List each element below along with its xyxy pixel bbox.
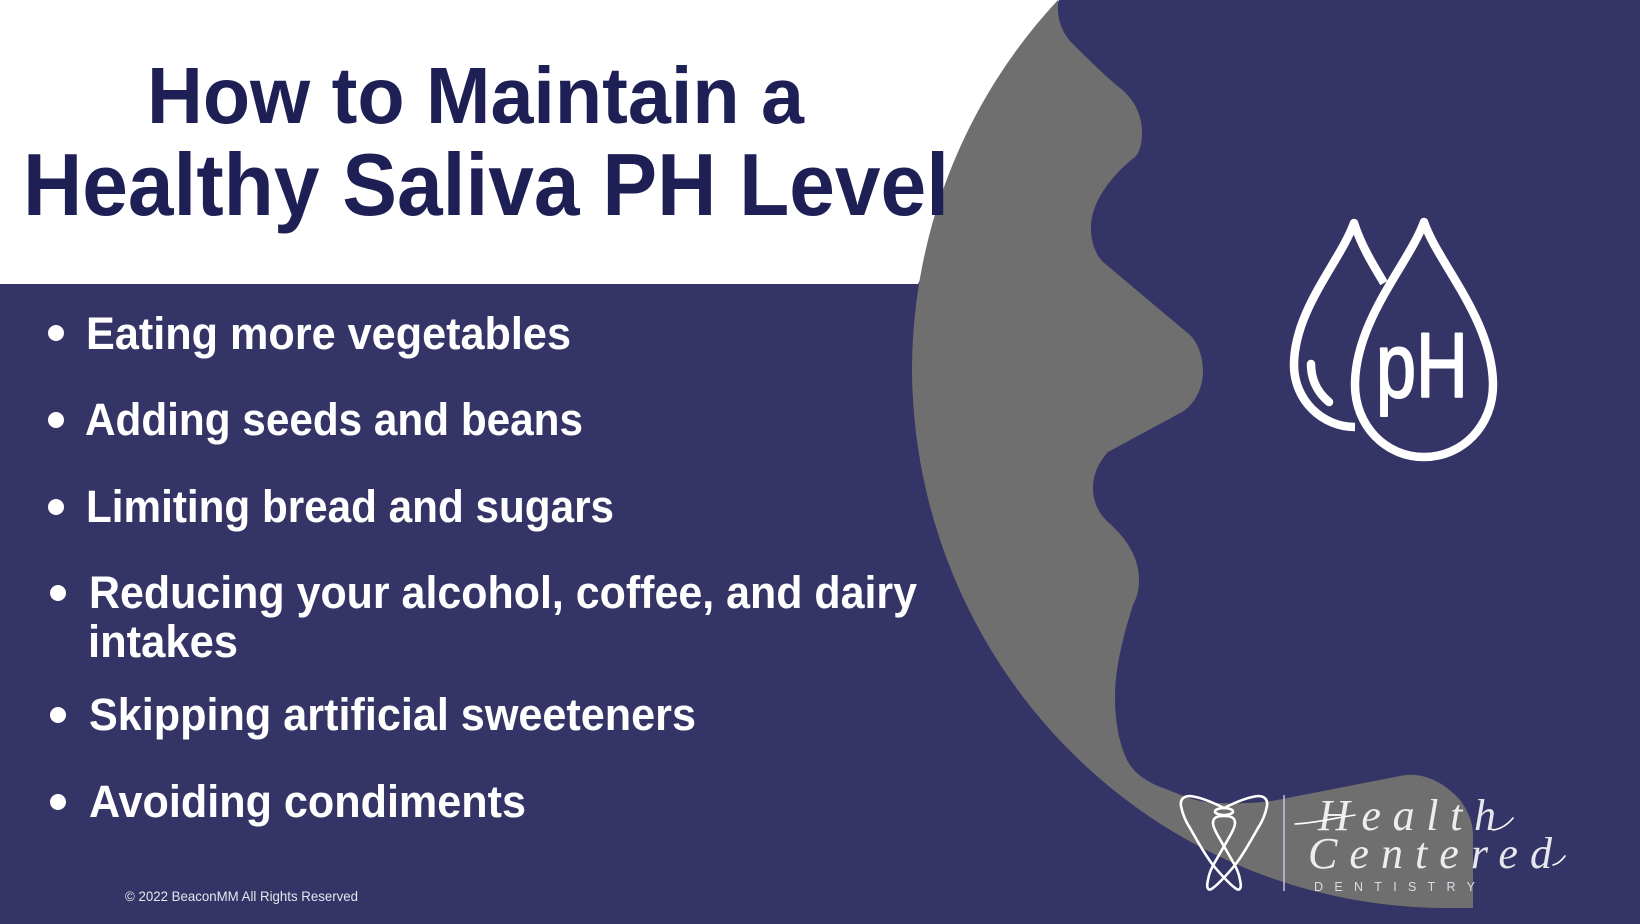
title: Healthy Saliva PH Level: [23, 135, 949, 234]
face silhouette: [912, 0, 1473, 908]
logo: tooth mark: [1181, 796, 1267, 890]
bullet list: [48, 308, 917, 827]
icon: front drop: [1355, 222, 1493, 457]
icon: pH label: pH: [1376, 315, 1468, 417]
list item: seeds and beans: Adding seeds and beans: [85, 394, 583, 445]
panel: white title background: [0, 0, 1059, 284]
logo: Health Centered Dentistry: [1181, 791, 1565, 894]
logo: divider: [1283, 795, 1285, 891]
list item: artificial sweeteners: Skipping artificial sweeteners: [89, 689, 696, 740]
list item: vegetables: Eating more vegetables: [86, 308, 571, 359]
logo: wordmark: [1295, 791, 1565, 894]
list item: condiments: Avoiding condiments: [89, 776, 526, 827]
logo: wordmark: Centered: [1308, 829, 1553, 878]
icon: back drop: [1294, 223, 1384, 427]
logo: wordmark: DENTISTRY: [1314, 880, 1476, 894]
icon: drop highlight: [1311, 364, 1329, 402]
icon: pH water drops: [1294, 222, 1493, 457]
list item: alcohol, coffee, dairy: intakes: [88, 616, 238, 667]
list item: alcohol, coffee, dairy: Reducing your alcohol, coffee, and dairy: [89, 567, 917, 618]
copyright footer: © 2022 BeaconMM All Rights Reserved: [125, 888, 358, 904]
logo: name flourishes: [1295, 815, 1565, 865]
list item: bread and sugars: Limiting bread and sugars: [86, 481, 614, 532]
logo: wordmark: Health: [1317, 791, 1496, 840]
list item: alcohol, coffee, dairy: [50, 567, 917, 667]
title: How to Maintain a: [147, 51, 804, 140]
title: [23, 51, 949, 234]
